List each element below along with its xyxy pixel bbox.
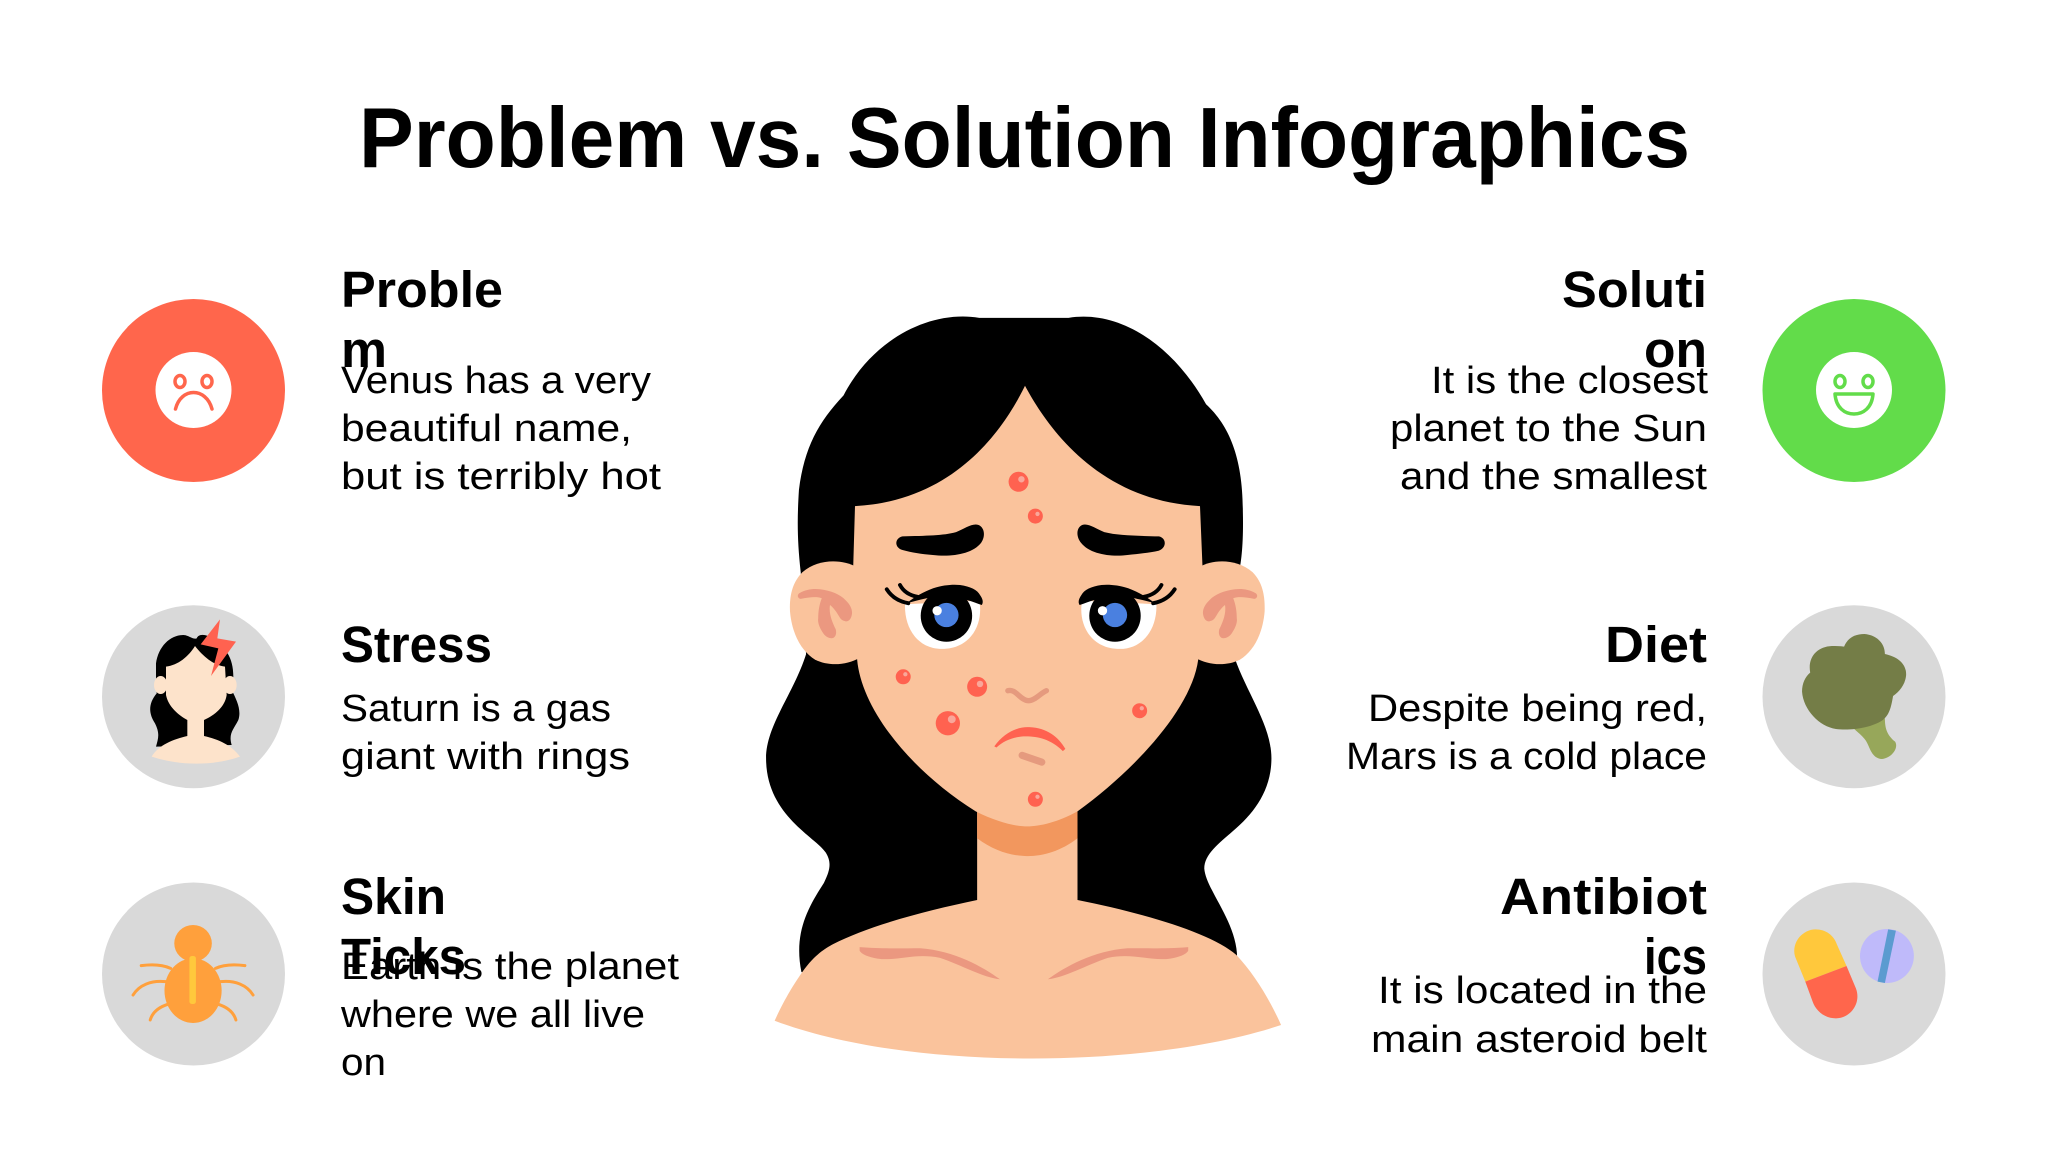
lower lip crease [1022, 755, 1042, 762]
hair [766, 317, 1271, 972]
panel: diet [1346, 605, 1946, 788]
icon: tick [102, 882, 285, 1066]
text: skin ticks description: where we all live [340, 994, 645, 1036]
title: Problem vs. Solution Infographics [359, 91, 1690, 186]
text: antibiotics description: main asteroid belt [1371, 1019, 1707, 1061]
text: solution description: It is the closest [1431, 360, 1708, 402]
heading: antibiotics: ics [1644, 928, 1707, 985]
text: skin ticks description: on [341, 1042, 386, 1084]
text: diet description: Despite being red, [1368, 688, 1707, 730]
text: antibiotics description: It is located in the [1378, 970, 1707, 1012]
heading: problem: Proble [341, 261, 503, 318]
panel: antibiotics [1371, 868, 1946, 1066]
illustration: woman with acne [766, 317, 1281, 1058]
eyebrows [896, 525, 1165, 556]
text: problem description: beautiful name, [341, 408, 632, 450]
eye right [1079, 585, 1175, 649]
panel: stress [102, 605, 630, 788]
clavicle left [860, 947, 1000, 979]
icon: sad face [102, 299, 285, 482]
panel: skin ticks [102, 868, 679, 1084]
heading: problem: m [341, 321, 387, 378]
neck shadow [977, 804, 1077, 856]
text: solution description: and the smallest [1400, 456, 1707, 498]
ears [790, 561, 1265, 664]
text: stress description: giant with rings [341, 736, 630, 778]
panel: solution [1390, 261, 1946, 498]
neck and shoulders [775, 804, 1281, 1058]
eye left [887, 585, 983, 649]
clavicle right [1048, 947, 1188, 979]
text: problem description: Venus has a very [341, 360, 651, 402]
heading: solution: on [1644, 321, 1707, 378]
icon: broccoli [1762, 605, 1946, 788]
icon: pills [1762, 882, 1946, 1066]
text: problem description: but is terribly hot [341, 456, 661, 498]
nose [1008, 690, 1046, 701]
face [853, 386, 1202, 826]
text: stress description: Saturn is a gas [341, 688, 611, 730]
heading: skin ticks: Skin [341, 868, 446, 925]
icon: stressed woman [102, 605, 285, 788]
heading: antibiotics: Antibiot [1500, 868, 1707, 925]
heading: skin ticks: Ticks [341, 928, 466, 985]
mouth [994, 727, 1065, 751]
text: diet description: Mars is a cold place [1346, 736, 1707, 778]
pimples [896, 472, 1147, 807]
text: solution description: planet to the Sun [1390, 408, 1707, 450]
heading: diet: Diet [1605, 616, 1707, 673]
heading: solution: Soluti [1562, 261, 1707, 318]
text: skin ticks description: Earth is the planet [341, 946, 679, 988]
heading: stress: Stress [341, 616, 492, 673]
icon: happy face [1762, 299, 1946, 482]
panel: problem [102, 261, 661, 498]
